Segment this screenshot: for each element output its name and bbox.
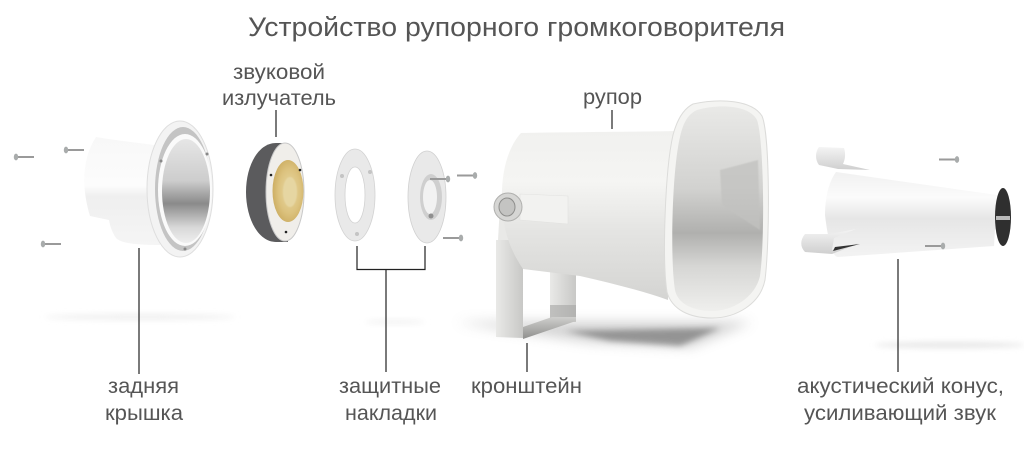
label: acoustic cone: акустический конус, xyxy=(797,375,1004,398)
label: horn: рупор xyxy=(583,86,642,109)
back cover inner opening xyxy=(158,134,212,246)
back cover flange xyxy=(147,121,213,257)
bolt xyxy=(494,193,522,221)
back cover xyxy=(84,121,213,257)
screws of back cover xyxy=(14,147,84,247)
horn mouth interior xyxy=(672,106,763,311)
protective plate xyxy=(408,151,446,243)
horn mouth rim xyxy=(665,101,768,318)
emitter dark housing xyxy=(246,143,288,242)
horn xyxy=(494,101,768,318)
screws of cone xyxy=(925,156,959,249)
label: acoustic cone: усиливающий звук xyxy=(804,402,997,425)
label: acoustic cone xyxy=(797,375,1004,425)
label: protective plates: накладки xyxy=(345,402,437,425)
label: protective plates: защитные xyxy=(339,375,441,398)
horn body xyxy=(502,131,675,300)
label: sound emitter: излучатель xyxy=(222,87,336,110)
front arm xyxy=(496,240,523,338)
sound emitter xyxy=(246,143,304,242)
horn bracket xyxy=(496,205,576,339)
label: sound emitter xyxy=(222,61,336,110)
label: back cover: задняя xyxy=(108,375,179,398)
cone bottom lug xyxy=(801,229,860,254)
emitter yellow dome xyxy=(272,160,304,222)
acoustic cone xyxy=(801,147,1011,257)
cone body xyxy=(825,172,997,257)
label: back cover xyxy=(105,375,183,425)
title: Устройство рупорного громкоговорителя xyxy=(248,12,785,42)
emitter face plate xyxy=(266,143,304,241)
label: bracket: кронштейн xyxy=(471,375,582,398)
cone dark end cap xyxy=(995,188,1011,246)
rear arm xyxy=(550,272,576,322)
leader lines xyxy=(139,110,898,374)
bottom strip xyxy=(523,317,576,339)
label: sound emitter: звуковой xyxy=(233,61,325,84)
floor shadows xyxy=(45,314,1024,348)
screws of plate xyxy=(430,172,477,241)
cone top lug xyxy=(816,147,870,170)
label: protective plates xyxy=(339,375,441,425)
protective ring xyxy=(335,149,375,241)
horn strap xyxy=(520,194,568,224)
label: back cover: крышка xyxy=(105,402,183,425)
back cover body xyxy=(84,137,160,245)
